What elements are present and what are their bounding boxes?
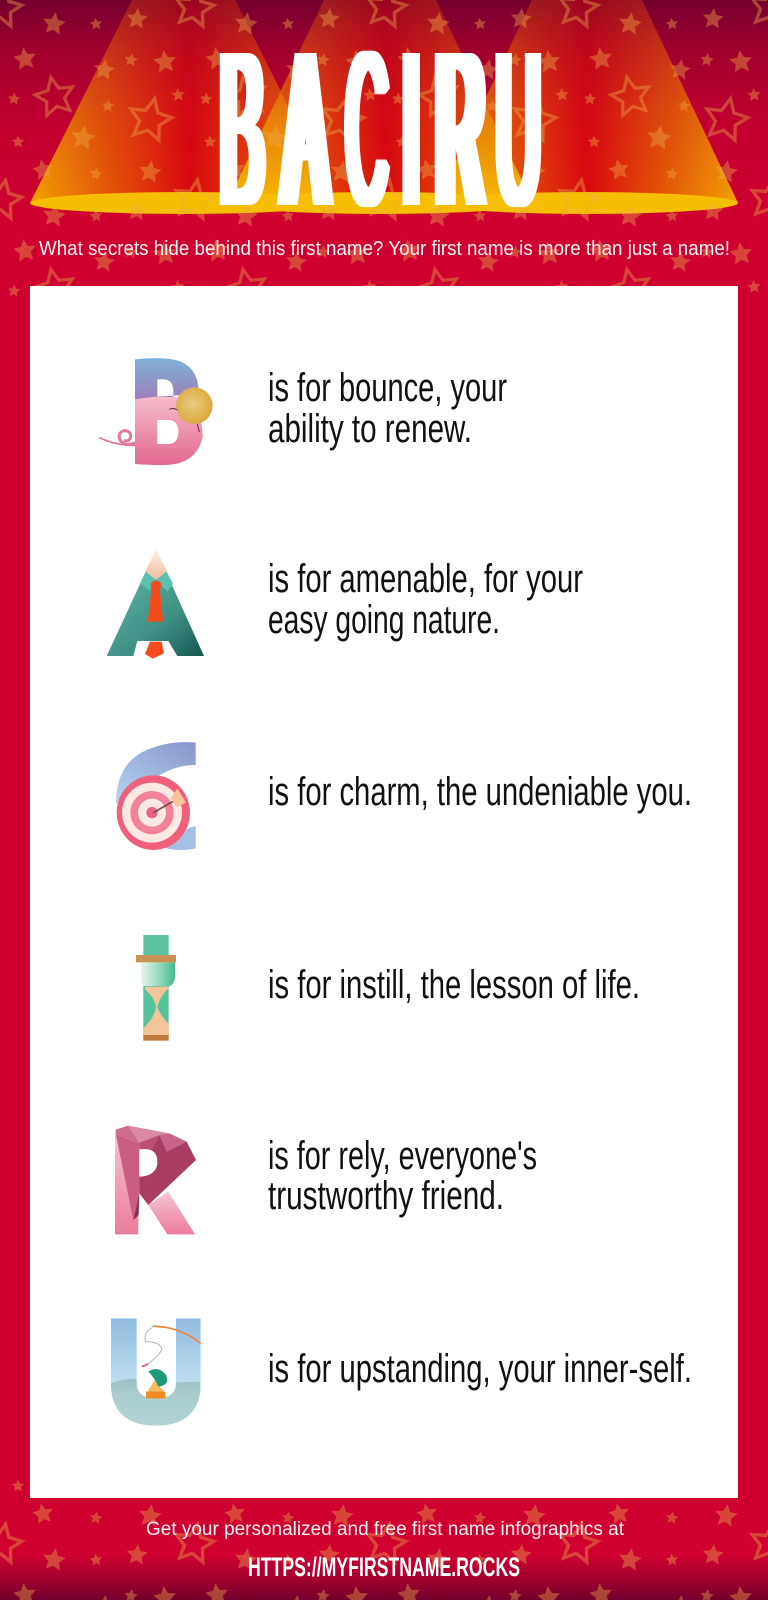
content layer — [30, 240, 738, 1576]
icon: letter U with fishing scene — [110, 1317, 202, 1427]
text: B line — [268, 366, 507, 451]
icon: letter A with shirt and tie — [107, 549, 204, 659]
title: R — [437, 5, 483, 252]
text: B line: ability to renew. — [268, 407, 472, 451]
title: C — [346, 5, 387, 252]
subtitle: What secrets hide behind this first name? Your first name is more than just a name! — [39, 238, 730, 260]
icon: letter C with target — [116, 742, 196, 850]
icon: letter I with hourglass — [136, 935, 176, 1041]
text: B line: is for bounce, your — [268, 366, 507, 410]
footer url: HTTPS://MYFIRSTNAME.ROCKS — [248, 1552, 520, 1582]
text: A line — [268, 557, 583, 642]
row: letter A — [107, 549, 583, 659]
text: I line: is for instill, the lesson of life. — [268, 963, 640, 1007]
text: R line — [268, 1134, 537, 1218]
icon: letter B piggy bank — [99, 358, 213, 465]
text: A line: is for amenable, for your — [268, 557, 583, 601]
title: U — [496, 5, 541, 252]
title: I — [402, 5, 420, 252]
footer text: Get your personalized and free first name infographics at — [146, 1519, 625, 1540]
title — [220, 5, 542, 252]
text: R line: is for rely, everyone's — [268, 1134, 537, 1178]
row: letter C — [116, 742, 692, 850]
text: R line: trustworthy friend. — [268, 1174, 504, 1218]
row: letter B — [99, 358, 507, 465]
icon: letter R with gem — [115, 1126, 196, 1234]
title: B — [220, 5, 264, 252]
row: letter I — [136, 935, 640, 1041]
panel: letters — [30, 286, 738, 1498]
title: A — [284, 5, 327, 252]
row: letter R — [115, 1126, 537, 1234]
text: A line: easy going nature. — [268, 598, 500, 642]
spotlights — [30, 0, 738, 214]
row: letter U — [110, 1317, 692, 1427]
